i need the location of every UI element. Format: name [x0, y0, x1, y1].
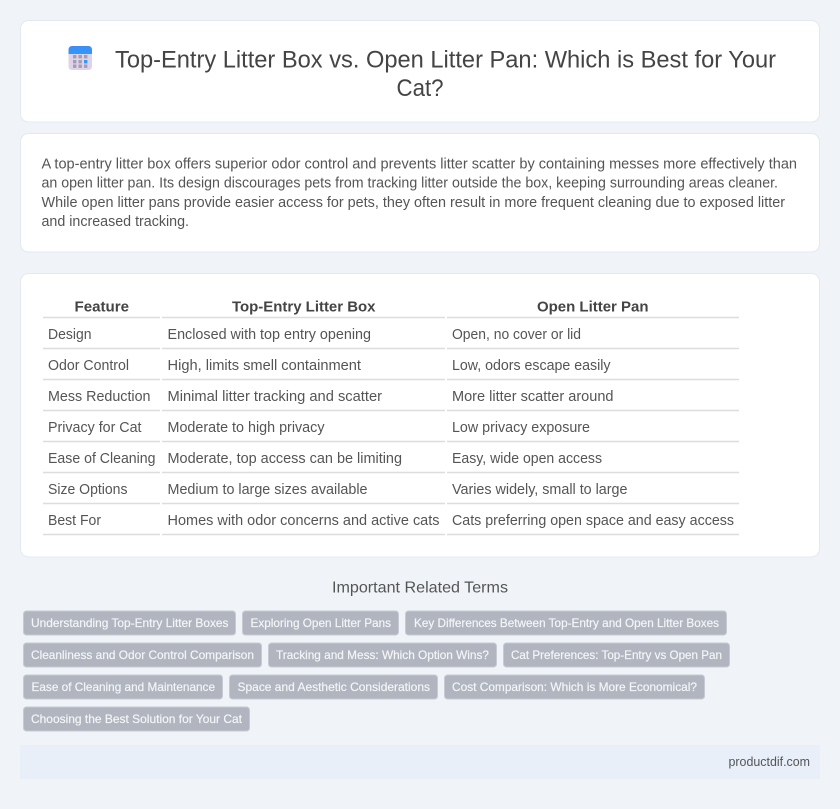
title — [115, 46, 776, 102]
row: design: Design — [48, 327, 92, 343]
row: odor control: Low, odors escape easily — [452, 358, 611, 374]
panel: related term tags: Cost Comparison: Which is More Economical? — [452, 680, 697, 694]
row: mess reduction: Mess Reduction — [48, 389, 150, 405]
panel: title header — [20, 20, 820, 122]
title: Cat? — [396, 75, 444, 102]
panel: intro text: While open litter pans provide easier access for pets, they often result in more frequent cleaning due to exposed litter — [42, 195, 785, 211]
panel: intro text: and increased tracking. — [42, 214, 189, 230]
row: size options: Size Options — [48, 482, 128, 498]
panel: intro text: an open litter pan. Its design discourages pets from tracking litter outside the box, keeping surrounding areas cleaner. — [42, 176, 778, 192]
row: size options — [48, 482, 628, 498]
row: design: Enclosed with top entry opening — [168, 327, 371, 343]
heading: related terms: Important Related Terms — [332, 580, 508, 597]
panel: related term tags: Cat Preferences: Top-Entry vs Open Pan — [511, 648, 722, 662]
row: size options: Varies widely, small to large — [452, 482, 628, 498]
panel: related term tags: Exploring Open Litter Pans — [250, 616, 391, 630]
icon: calendar — [68, 46, 92, 70]
panel: related term tags: Choosing the Best Solution for Your Cat — [31, 712, 243, 726]
row: privacy: Privacy for Cat — [48, 420, 142, 436]
row: ease of cleaning — [48, 451, 602, 467]
row: best for: Best For — [48, 513, 101, 529]
panel: related term tags: Cleanliness and Odor Control Comparison — [31, 648, 254, 662]
row: odor control: High, limits smell containment — [168, 358, 361, 374]
row: mess reduction: More litter scatter around — [452, 389, 614, 405]
table header: Open Litter Pan — [537, 299, 648, 316]
row: design: Open, no cover or lid — [452, 327, 581, 343]
footer bar — [20, 745, 820, 779]
panel: related term tags — [24, 611, 730, 731]
panel: comparison table — [20, 274, 820, 557]
row: privacy: Low privacy exposure — [452, 420, 590, 436]
row: mess reduction: Minimal litter tracking and scatter — [168, 389, 382, 405]
row: design — [48, 327, 581, 343]
table header: Top-Entry Litter Box — [232, 299, 376, 316]
panel: related term tags: Tracking and Mess: Which Option Wins? — [276, 648, 489, 662]
panel: intro text: A top-entry litter box offers superior odor control and prevents litter scatter by containing messes more effectively than — [42, 156, 797, 172]
row: ease of cleaning: Moderate, top access can be limiting — [168, 451, 402, 467]
panel: related term tags: Understanding Top-Entry Litter Boxes — [31, 616, 228, 630]
panel: related term tags: Key Differences Between Top-Entry and Open Litter Boxes — [414, 616, 719, 630]
row: best for — [48, 513, 734, 529]
footer bar: productdif.com — [728, 755, 810, 769]
row: odor control: Odor Control — [48, 358, 129, 374]
panel: intro text — [20, 134, 820, 252]
row: privacy — [48, 420, 590, 436]
panel: related term tags: Space and Aesthetic Considerations — [238, 680, 430, 694]
table header: Feature — [74, 299, 129, 316]
panel: related term tags: Ease of Cleaning and Maintenance — [32, 680, 215, 694]
row: odor control — [48, 358, 611, 374]
row: ease of cleaning: Ease of Cleaning — [48, 451, 156, 467]
row: mess reduction — [48, 389, 614, 405]
row: best for: Cats preferring open space and easy access — [452, 513, 734, 529]
row: best for: Homes with odor concerns and active cats — [168, 513, 440, 529]
row: privacy: Moderate to high privacy — [168, 420, 325, 436]
row: size options: Medium to large sizes available — [168, 482, 368, 498]
row: ease of cleaning: Easy, wide open access — [452, 451, 602, 467]
title: Top-Entry Litter Box vs. Open Litter Pan: Which is Best for Your — [115, 46, 776, 74]
table header — [74, 299, 648, 316]
